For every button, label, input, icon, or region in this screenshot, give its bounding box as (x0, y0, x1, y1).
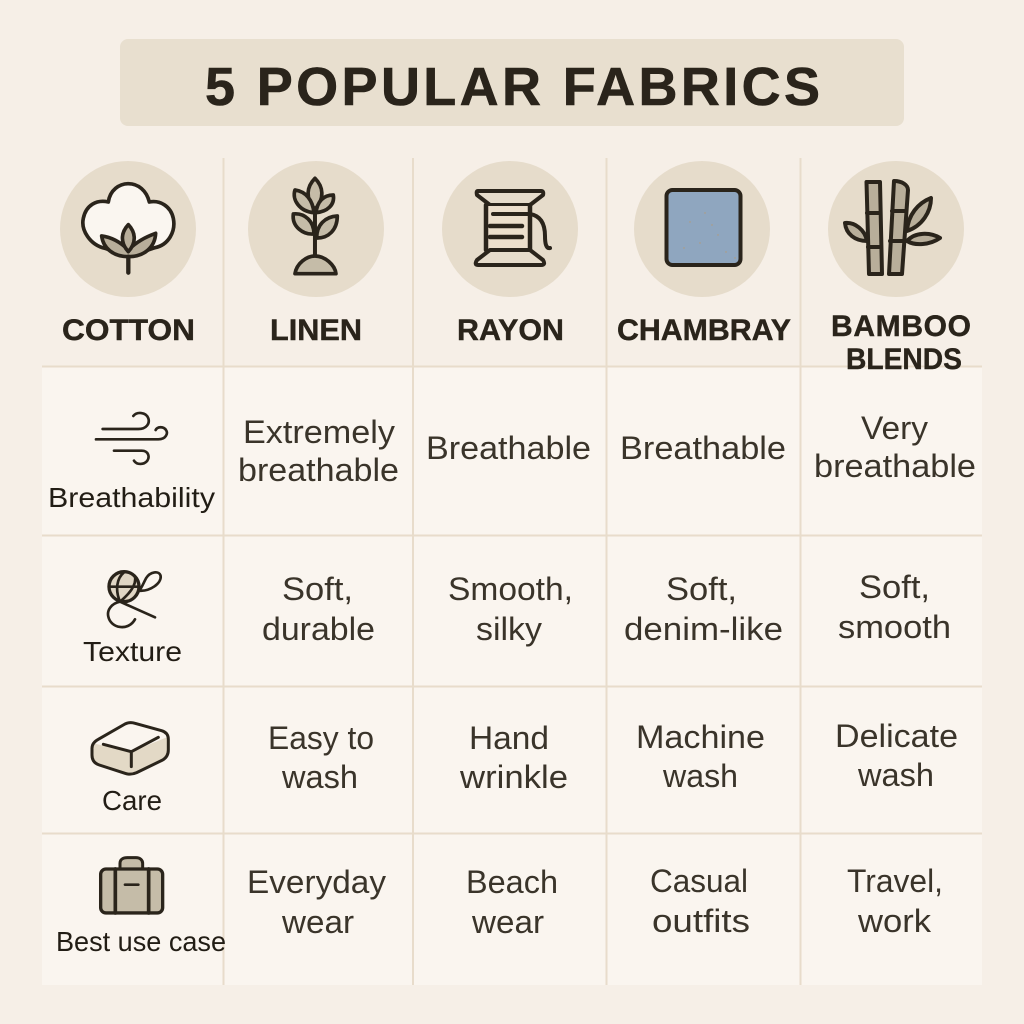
text: bamboo breathability (814, 410, 976, 484)
text: linen care: wrinkle (459, 759, 568, 795)
row: texture (83, 569, 951, 667)
text: bamboo texture: Soft, (859, 569, 930, 605)
text: cotton texture (262, 571, 375, 647)
icon: bamboo (828, 161, 964, 297)
label: care: Care (102, 785, 162, 816)
title (120, 39, 904, 126)
text: cotton use case: Everyday (247, 864, 386, 900)
text: bamboo use case (847, 863, 943, 939)
panel: chambray header (617, 161, 791, 347)
icon: thread spool (442, 161, 578, 297)
icon: wind (96, 413, 167, 464)
label: cotton: COTTON (62, 314, 195, 347)
text: rayon breathability: Breathable (620, 430, 786, 466)
label: rayon: RAYON (457, 314, 564, 347)
icon: chambray swatch (634, 161, 770, 297)
text: cotton texture: Soft, (282, 571, 353, 607)
icon: linen plant (248, 161, 384, 297)
text: rayon texture (624, 571, 783, 647)
text: cotton use case: wear (281, 904, 354, 940)
text: rayon care: wash (662, 758, 738, 794)
text: bamboo use case: Travel, (847, 863, 943, 899)
comparison table grid (42, 158, 982, 985)
row: best use case (56, 858, 943, 957)
panel: linen header (248, 161, 384, 347)
text: bamboo breathability: breathable (814, 448, 976, 484)
text: linen care (459, 720, 568, 795)
text: bamboo care: Delicate (835, 718, 958, 754)
panel: bamboo blends header (828, 161, 971, 376)
text: linen texture: silky (476, 611, 542, 647)
text: rayon use case: Casual (650, 863, 748, 899)
text: linen breathability: Breathable (426, 430, 591, 466)
text: rayon texture: Soft, (666, 571, 737, 607)
label: bamboo blends: BLENDS (846, 343, 962, 376)
label: chambray: CHAMBRAY (617, 314, 791, 347)
text: cotton use case (247, 864, 386, 940)
text: linen use case: wear (471, 904, 544, 940)
text: linen texture: Smooth, (448, 571, 573, 607)
panel: rayon header (442, 161, 578, 347)
text: rayon care: Machine (636, 719, 765, 755)
label: best use case: Best use case (56, 926, 226, 957)
text: bamboo care: wash (857, 757, 934, 793)
text: bamboo care (835, 718, 958, 793)
title: 5 POPULAR FABRICS (205, 57, 820, 117)
text: rayon care (636, 719, 765, 794)
text: rayon use case: outfits (652, 903, 750, 939)
text: cotton breathability: breathable (238, 452, 399, 488)
text: linen care: Hand (469, 720, 549, 756)
text: cotton texture: durable (262, 611, 375, 647)
text: cotton breathability: Extremely (243, 414, 395, 450)
row: care (92, 718, 958, 816)
label: linen: LINEN (270, 314, 362, 347)
label: breathability: Breathability (48, 482, 215, 513)
icon: cotton boll (60, 161, 196, 297)
icon: soap bar (92, 723, 168, 774)
label: bamboo blends: BAMBOO (831, 310, 971, 343)
text: cotton care (268, 720, 374, 795)
row: breathability (48, 410, 976, 513)
label: bamboo blends (831, 310, 971, 376)
panel: cotton header (60, 161, 196, 347)
label: texture: Texture (83, 636, 182, 667)
text: linen texture (448, 571, 573, 647)
text: bamboo use case: work (857, 903, 932, 939)
text: linen use case (466, 864, 558, 940)
text: linen use case: Beach (466, 864, 558, 900)
text: cotton care: wash (281, 759, 358, 795)
text: cotton care: Easy to (268, 720, 374, 756)
text: rayon use case (650, 863, 750, 939)
icon: suitcase (101, 858, 163, 913)
text: cotton breathability (238, 414, 399, 488)
text: rayon texture: denim-like (624, 611, 783, 647)
text: bamboo breathability: Very (861, 410, 928, 446)
text: bamboo texture (838, 569, 951, 645)
icon: yarn ball (108, 572, 161, 627)
text: bamboo texture: smooth (838, 609, 951, 645)
